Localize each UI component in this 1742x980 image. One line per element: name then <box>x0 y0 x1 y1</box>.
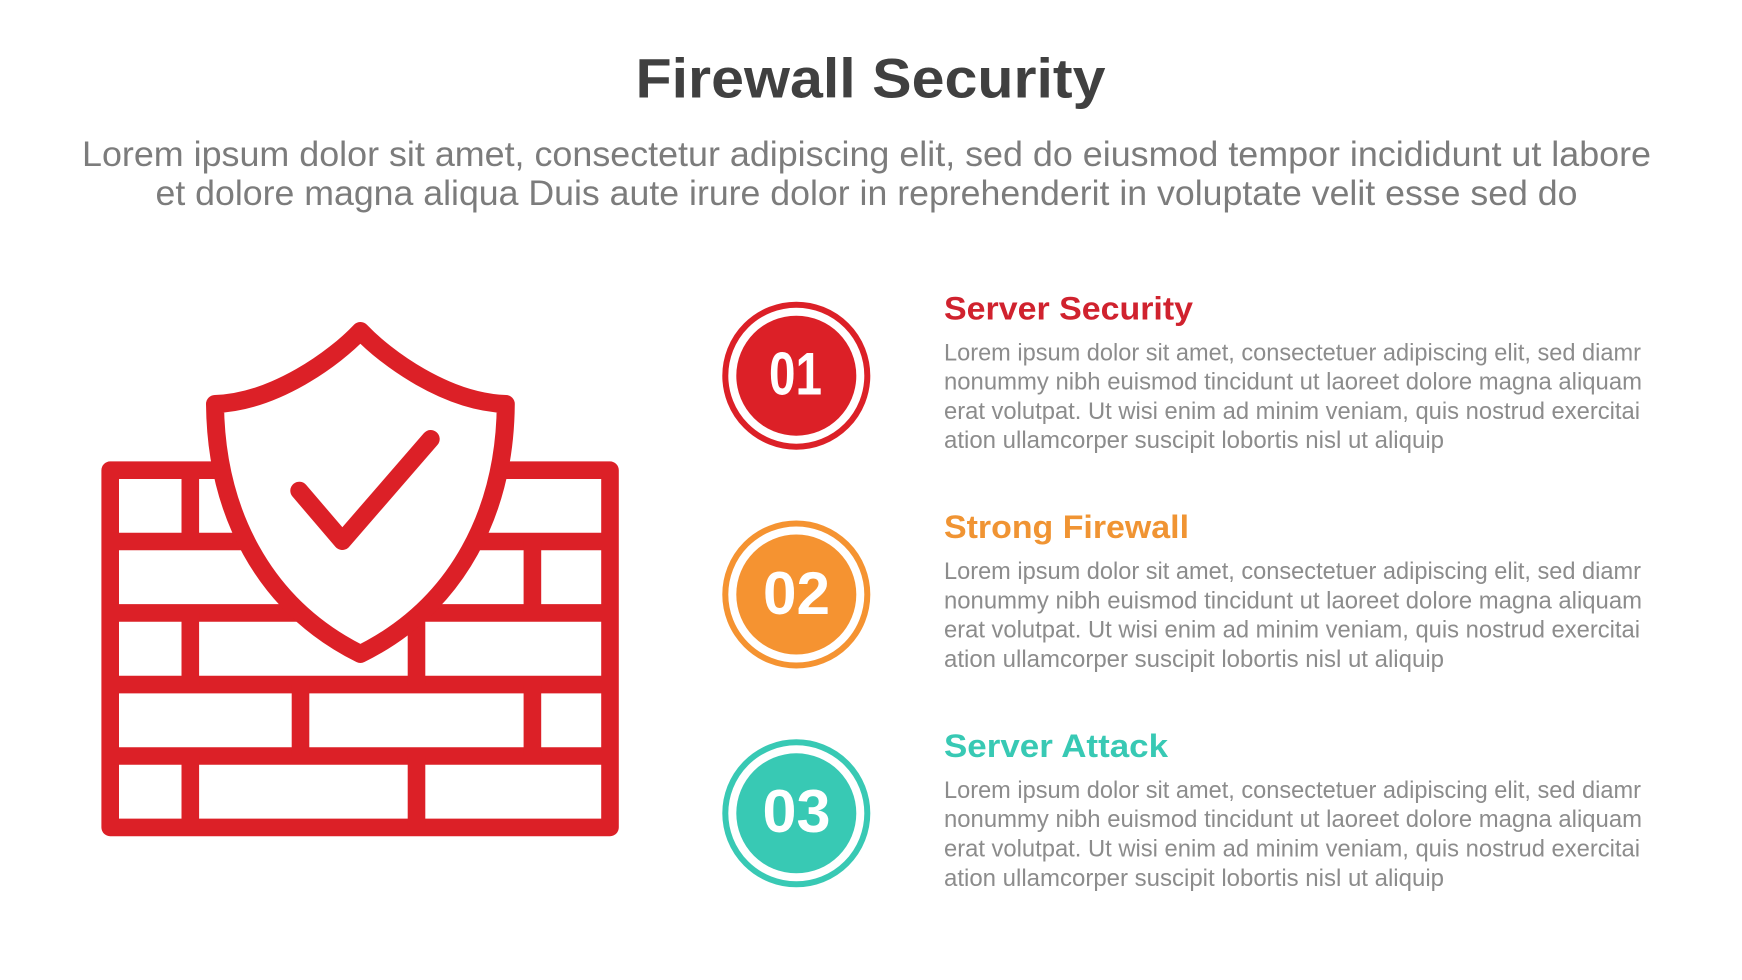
panel: server security <box>725 290 1642 454</box>
description: erat volutpat. Ut wisi enim ad minim veniam, quis nostrud exercitai <box>944 617 1640 644</box>
badge 01: 01 <box>769 340 822 408</box>
badge 02 <box>725 524 867 666</box>
badge 02: 02 <box>763 560 830 627</box>
description: erat volutpat. Ut wisi enim ad minim veniam, quis nostrud exercitai <box>944 836 1640 862</box>
description: erat volutpat. Ut wisi enim ad minim veniam, quis nostrud exercitai <box>944 398 1640 425</box>
description: ation ullamcorper suscipit lobortis nisl ut aliquip <box>944 427 1444 454</box>
subtitle text block: et dolore magna aliqua Duis aute irure dolor in reprehenderit in voluptate velit esse sed do <box>156 174 1577 213</box>
description <box>944 339 1642 454</box>
description: ation ullamcorper suscipit lobortis nisl ut aliquip <box>944 865 1444 892</box>
heading: Server Attack <box>944 728 1168 764</box>
heading: Strong Firewall <box>944 509 1189 545</box>
icon: brick wall with shield <box>110 331 610 827</box>
description: nonummy nibh euismod tincidunt ut laoreet dolore magna aliquam <box>944 806 1642 833</box>
panel: strong firewall <box>725 509 1642 673</box>
badge 01 <box>725 305 867 447</box>
badge 03: 03 <box>762 778 830 845</box>
subtitle text block: Lorem ipsum dolor sit amet, consectetur adipiscing elit, sed do eiusmod tempor incididunt ut labore <box>82 135 1651 174</box>
subtitle text block <box>82 135 1651 213</box>
description <box>944 558 1642 673</box>
heading: Server Security <box>944 290 1193 326</box>
description <box>944 777 1642 892</box>
description: nonummy nibh euismod tincidunt ut laoreet dolore magna aliquam <box>944 369 1642 396</box>
title: Firewall Security <box>636 46 1106 110</box>
icon: brick wall <box>110 470 610 827</box>
description: ation ullamcorper suscipit lobortis nisl ut aliquip <box>944 646 1444 673</box>
description: Lorem ipsum dolor sit amet, consectetuer adipiscing elit, sed diamr <box>944 339 1641 366</box>
description: Lorem ipsum dolor sit amet, consectetuer adipiscing elit, sed diamr <box>944 777 1641 804</box>
description: Lorem ipsum dolor sit amet, consectetuer adipiscing elit, sed diamr <box>944 558 1641 585</box>
badge 03 <box>725 742 867 884</box>
description: nonummy nibh euismod tincidunt ut laoreet dolore magna aliquam <box>944 587 1642 614</box>
icon: shield <box>215 331 506 654</box>
icon: check mark <box>299 439 431 541</box>
panel: server attack <box>725 728 1642 892</box>
